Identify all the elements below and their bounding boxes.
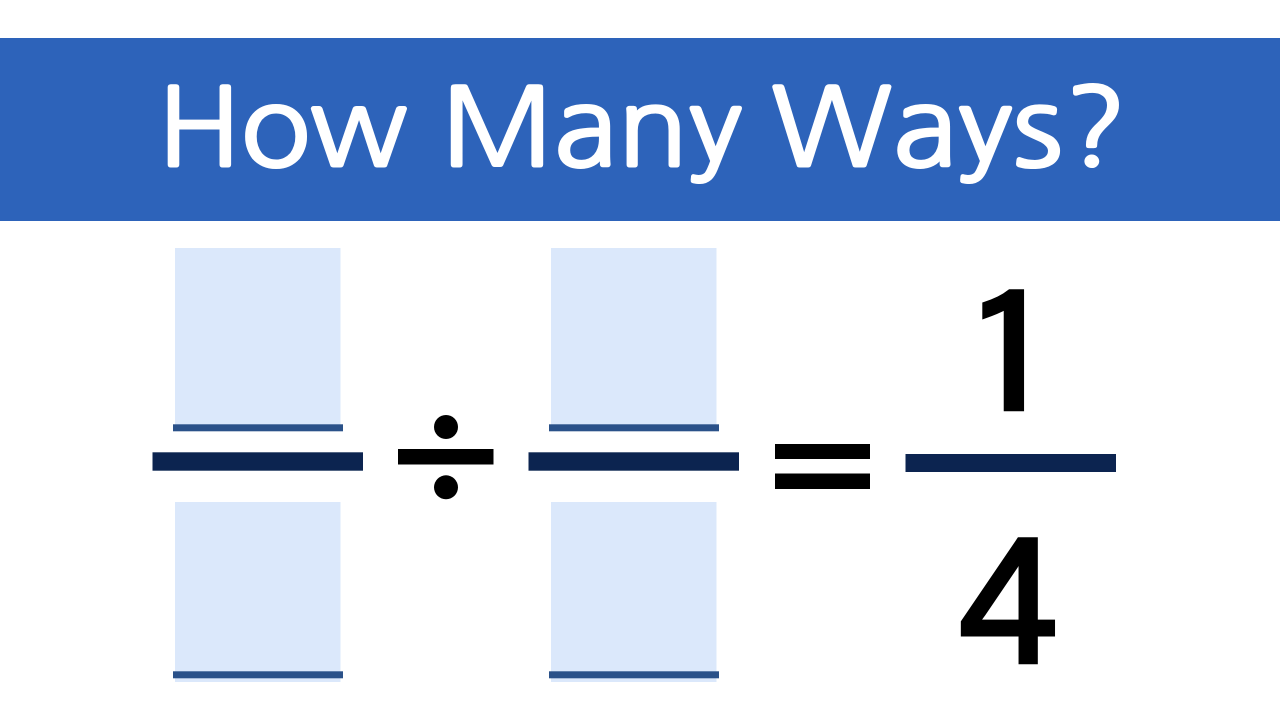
second fraction bbox=[528, 248, 739, 682]
result fraction one quarter bbox=[906, 269, 1116, 700]
title: How bbox=[158, 74, 408, 182]
title: Ways? bbox=[771, 74, 1127, 183]
division sign bbox=[398, 415, 494, 499]
first fraction bbox=[152, 248, 363, 682]
title bbox=[158, 74, 1127, 183]
title: Many bbox=[441, 74, 742, 183]
numerator: 1 bbox=[960, 269, 1062, 439]
title banner bbox=[0, 38, 1280, 221]
denominator: 4 bbox=[959, 501, 1058, 700]
equals sign bbox=[775, 444, 870, 489]
